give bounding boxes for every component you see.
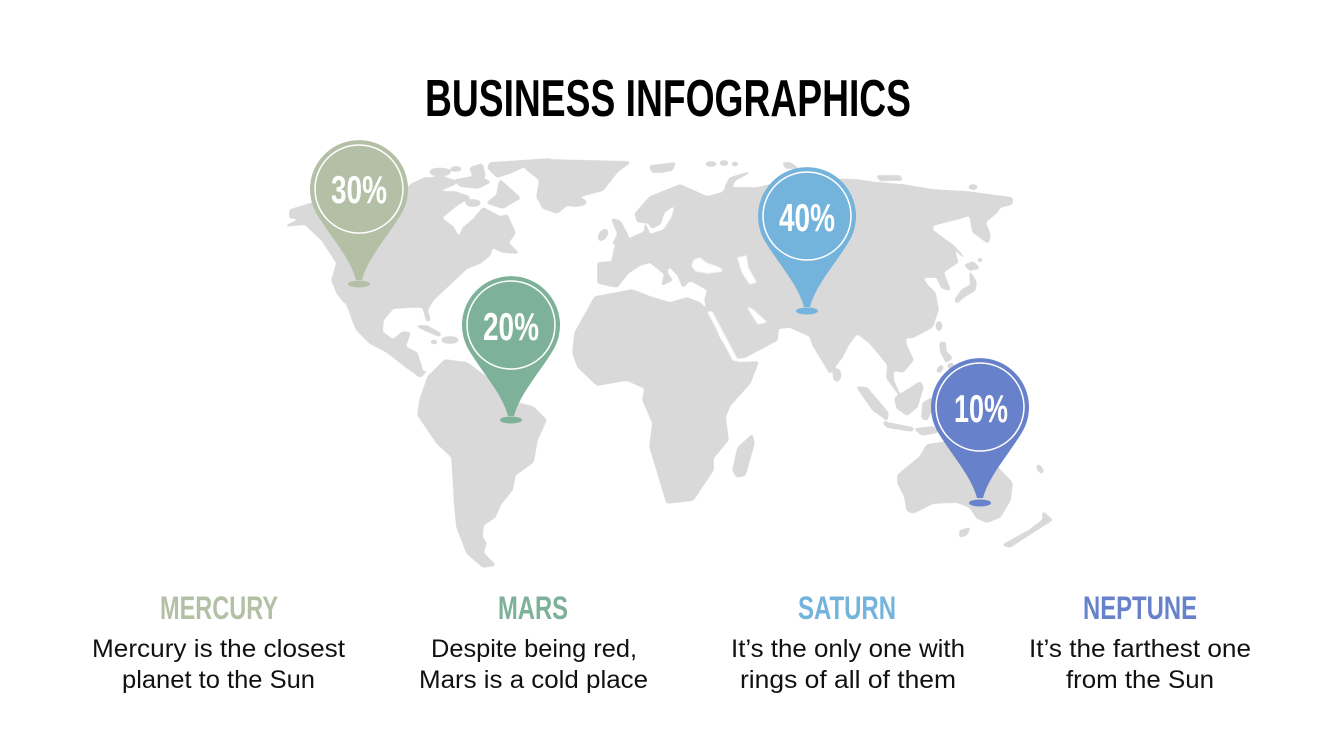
column: neptune: It’s the farthest one	[1029, 635, 1251, 663]
novaya zemlya	[725, 172, 750, 188]
pin: mars 20%: 20%	[483, 306, 539, 349]
world map	[286, 159, 1052, 567]
caribbean	[417, 326, 458, 344]
column: mars: Mars is a cold place	[419, 666, 648, 694]
column: saturn: rings of all of them	[740, 666, 956, 694]
column: mars: MARS	[498, 590, 568, 626]
pin: mars 20%	[462, 276, 560, 424]
tasmania	[960, 528, 970, 537]
column: neptune: from the Sun	[1066, 666, 1214, 694]
column: mars: Despite being red,	[431, 635, 637, 663]
inland seas	[345, 256, 766, 361]
column: saturn: SATURN	[798, 590, 896, 626]
indonesia	[857, 382, 938, 435]
new zealand	[1003, 512, 1052, 547]
australia	[898, 440, 1012, 522]
eurasia	[598, 178, 1012, 396]
british isles	[597, 219, 628, 244]
pin: saturn 40%: 40%	[779, 197, 835, 240]
pin: neptune 10%: 10%	[954, 388, 1008, 431]
north america	[286, 187, 518, 377]
column: neptune: NEPTUNE	[1083, 590, 1197, 626]
south america	[418, 360, 546, 567]
canadian arctic islands	[410, 159, 550, 208]
pin: mercury 30%	[310, 140, 408, 288]
pin: mercury 30%: 30%	[331, 169, 387, 212]
africa	[573, 290, 758, 503]
pin: saturn 40%	[758, 167, 856, 314]
new caledonia	[1036, 464, 1044, 474]
title: BUSINESS INFOGRAPHICS	[425, 70, 911, 128]
sri lanka	[834, 369, 840, 381]
column: mars	[419, 590, 648, 694]
japan and sakhalin	[953, 245, 982, 303]
column: neptune	[1029, 590, 1251, 694]
iceland	[564, 198, 586, 206]
column: saturn: It’s the only one with	[731, 635, 965, 663]
arctic islands	[650, 161, 977, 189]
column: saturn	[731, 590, 965, 694]
madagascar	[733, 435, 754, 477]
greenland	[525, 160, 630, 213]
column: mercury: planet to the Sun	[122, 666, 315, 694]
column: mercury: Mercury is the closest	[92, 635, 345, 663]
pin: neptune 10%	[931, 358, 1029, 506]
column: mercury	[92, 590, 345, 694]
taiwan and philippines	[936, 322, 954, 373]
column: mercury: MERCURY	[160, 590, 278, 626]
